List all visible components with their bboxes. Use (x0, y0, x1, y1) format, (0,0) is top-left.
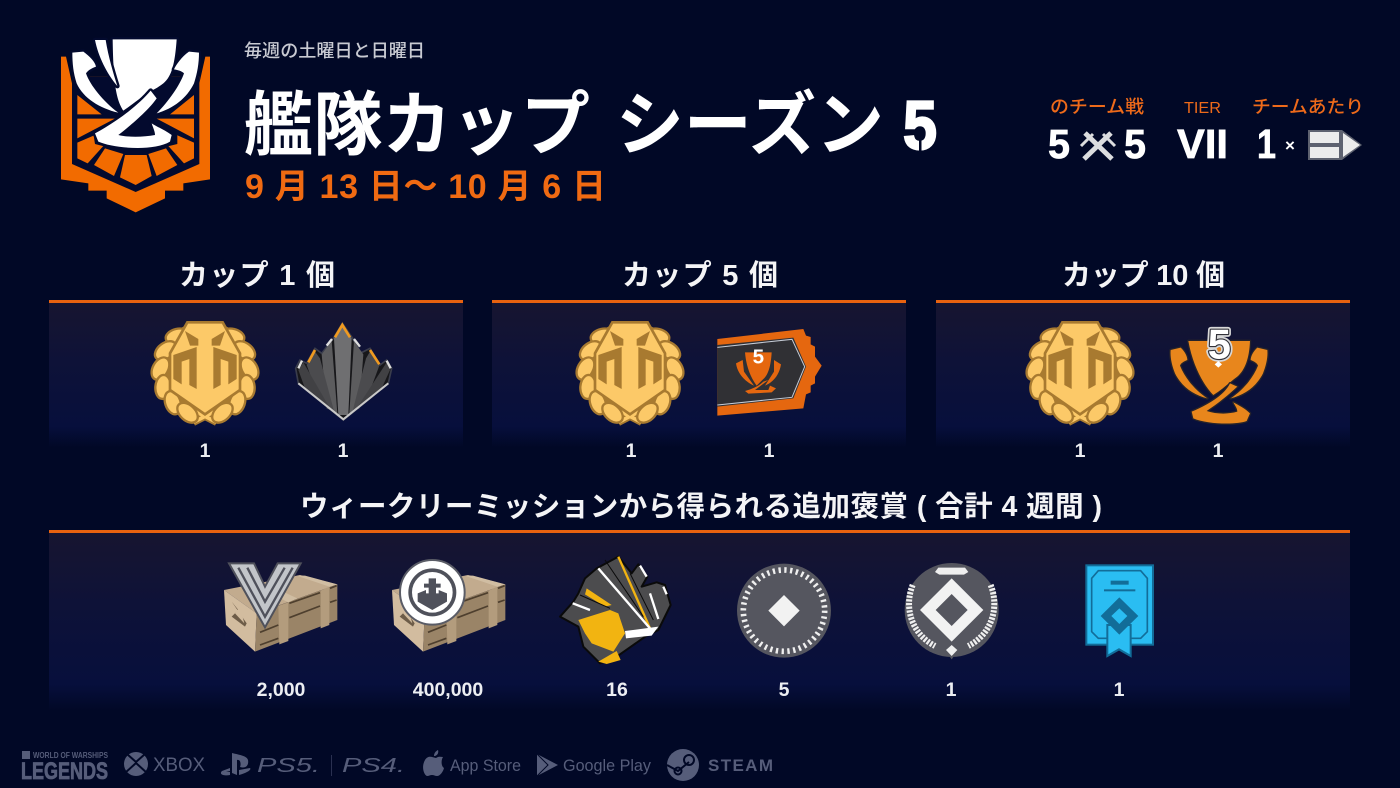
icon: shell (1308, 130, 1362, 160)
quantities: 1 (200, 440, 211, 462)
panel: 1 cup (49, 259, 463, 462)
icon: gold medal (148, 322, 262, 427)
logo: Xbox: XBOX (153, 755, 205, 776)
quantities: 1 (626, 440, 637, 462)
logo: Xbox (124, 752, 205, 776)
panel: weekly mission rewards: 400,000 (413, 679, 483, 701)
logo: World of Warships Legends: WORLD OF WARSHIPS (33, 751, 109, 760)
panel: 10 cups: 1 (1213, 440, 1224, 462)
logo: World of Warships Legends: LEGENDS (21, 758, 108, 785)
logo: App Store: App Store (450, 756, 521, 775)
per team allowance: × (1285, 136, 1295, 155)
title (244, 86, 937, 164)
panel: weekly mission rewards: 16 (606, 679, 628, 701)
heading: カップ 1 個 (179, 259, 335, 292)
icon: V crate (224, 563, 337, 652)
match format: team battle (1048, 97, 1146, 167)
heading: カップ 10 個 (1062, 259, 1225, 292)
icon: gold medal (1023, 322, 1137, 427)
match format: team battle: のチーム戦 (1050, 97, 1144, 117)
icon: laurel diamond emblem (905, 563, 999, 659)
per team allowance: チームあたり (1252, 97, 1364, 117)
title: 5 (903, 87, 937, 164)
logo: orange shield with white trophy (61, 39, 210, 212)
logo: PS5 and PS4 (221, 753, 405, 777)
icon: orange trophy: 5 (1208, 320, 1231, 367)
panel: 5 cups: 1 (764, 440, 775, 462)
icon: signal token (737, 564, 831, 658)
logo: World of Warships Legends (21, 751, 109, 785)
logo: Steam: STEAM (708, 756, 773, 775)
logo: Google Play (537, 754, 651, 776)
panel: weekly mission rewards: 5 (779, 679, 790, 701)
tier: TIER (1184, 100, 1221, 117)
icon: coin crate (392, 560, 505, 652)
quantities: 1 (1075, 440, 1086, 462)
panel: 1 cup: 1 (338, 440, 349, 462)
icon: crossed swords (1081, 133, 1115, 159)
panel: weekly mission rewards: 1 (1114, 679, 1125, 701)
logo: PS5 and PS4: PS4. (342, 755, 405, 777)
icon: dark fan badge (296, 323, 392, 420)
logo: Google Play: Google Play (563, 756, 651, 775)
icon: orange trophy (1171, 320, 1267, 424)
panel: 5 cups (492, 259, 906, 462)
icon: orange season ticket (717, 329, 822, 416)
panel: weekly mission rewards (49, 491, 1350, 711)
icon: orange trophy: 5 (1208, 320, 1231, 367)
heading: カップ 5 個 (622, 259, 778, 292)
panel: weekly mission rewards: 1 (946, 679, 957, 701)
title: 艦隊カップ (244, 86, 590, 164)
logo: Steam (667, 749, 773, 781)
footer: platform logos (21, 749, 773, 785)
match format: team battle: 5 (1048, 121, 1070, 167)
date range: 9 月 13 日〜 10 月 6 日 (245, 168, 606, 206)
subtitle: schedule: 毎週の土曜日と日曜日 (244, 41, 425, 61)
panel: 10 cups (936, 259, 1350, 462)
title: シーズン (616, 86, 884, 164)
per team allowance: 1 (1257, 121, 1276, 167)
match format: team battle: 5 (1124, 121, 1146, 167)
per team allowance (1252, 97, 1364, 167)
tier: VII (1177, 121, 1228, 167)
icon: blue certificate (1086, 565, 1153, 656)
heading: ウィークリーミッションから得られる追加褒賞 ( 合計 4 週間 ) (300, 491, 1102, 523)
logo: PS5 and PS4: PS5. (257, 755, 320, 777)
tier (1177, 100, 1228, 167)
quantities: 2,000 (257, 679, 306, 701)
icon: orange season ticket: 5 (753, 346, 764, 369)
icon: gold medal (573, 322, 687, 427)
icon: camouflage (560, 557, 671, 664)
logo: App Store (423, 750, 521, 776)
